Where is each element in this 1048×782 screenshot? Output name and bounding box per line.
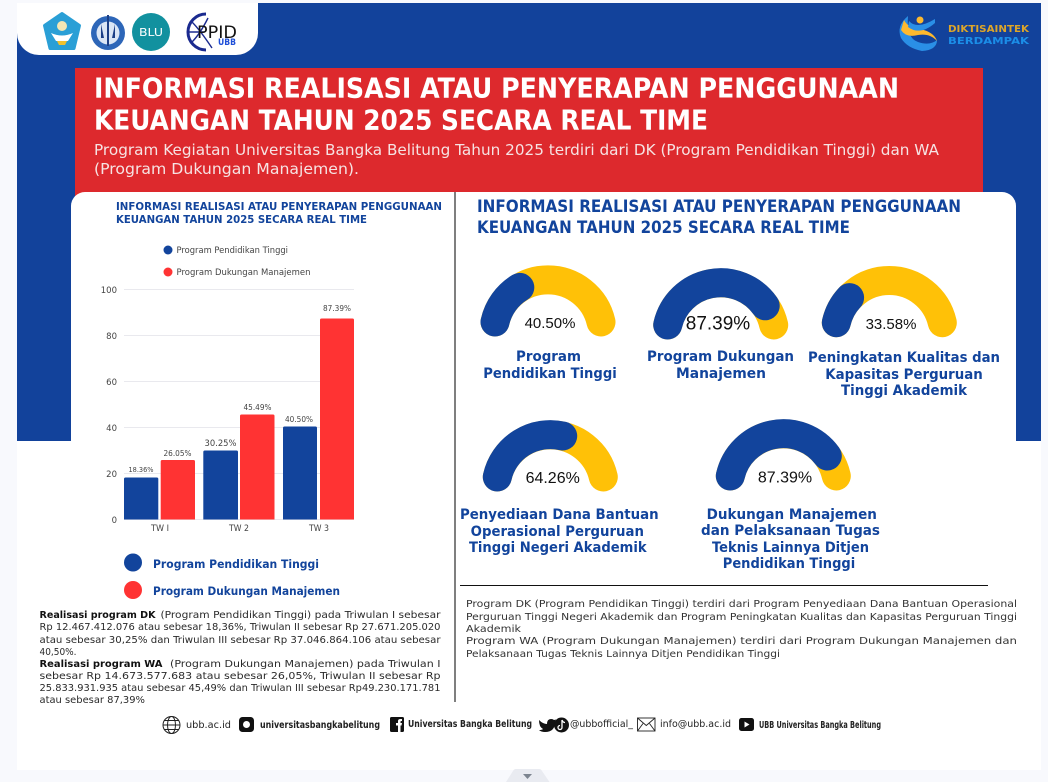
footer: social media contacts: info@ubb.ac.id	[660, 719, 731, 730]
bar chart: 30.25%	[204, 439, 237, 449]
gauge: Program Dukungan Manajemen: Program Dukungan	[647, 349, 794, 365]
footer: social media contacts: ubb.ac.id	[186, 720, 231, 731]
left panel: bar chart section	[40, 200, 442, 706]
text: realisasi program DK and WA: atau sebesar 87,39%	[40, 695, 145, 706]
text: program notes: Perguruan Tinggi Negeri Akademik dan Program Peningkatan Kualitas dan Kapasitas Perguruan Tinggi	[466, 612, 1017, 623]
icon: BLU logo: BLU	[139, 26, 163, 39]
subtitle	[94, 141, 940, 178]
icon: PPID UBB logo: PPID	[197, 23, 237, 43]
footer: social media contacts	[163, 716, 881, 734]
gauge: Program Pendidikan Tinggi: Program	[516, 349, 581, 365]
gauge: Penyediaan Dana Bantuan: Tinggi Negeri Akademik	[469, 540, 647, 556]
icon: instagram	[239, 717, 254, 732]
icon: facebook	[390, 717, 404, 732]
bar chart: 18.36%	[128, 466, 154, 474]
large legend: Program Pendidikan Tinggi	[153, 557, 319, 571]
bar chart: TW I	[150, 524, 169, 534]
icon: Tut Wuri Handayani logo	[44, 14, 80, 48]
Diktisaintek Berdampak logo	[900, 16, 1030, 51]
chart heading: KEUANGAN TAHUN 2025 SECARA REAL TIME	[116, 213, 367, 226]
bar chart: 60	[106, 378, 117, 388]
large legend	[124, 554, 340, 599]
text: program notes: Pelaksanaan Tugas Teknis Lainnya Ditjen Pendidikan Tinggi	[466, 649, 780, 660]
bar chart: 45.49%	[244, 403, 272, 412]
icon: tiktok	[554, 718, 569, 732]
gauge: Program Dukungan Manajemen: Manajemen	[676, 366, 766, 382]
gauge: Program Pendidikan Tinggi: 40.50%	[525, 315, 575, 332]
large legend: Program Dukungan Manajemen	[153, 584, 340, 598]
bar chart: TW 3	[308, 524, 329, 534]
bar chart: 20	[106, 470, 117, 480]
scroll tab with arrow	[506, 769, 550, 782]
icon: globe	[163, 716, 180, 734]
gauges heading	[477, 197, 961, 237]
chart legend: Program Dukungan Manajemen	[176, 268, 310, 278]
text: realisasi program DK and WA: sebesar Rp 14.673.577.683 atau sebesar 26,05%, Triwulan II sebesar Rp	[40, 671, 440, 682]
text: realisasi program DK and WA: Realisasi program DK	[40, 610, 157, 621]
gauge: Penyediaan Dana Bantuan: 64.26%	[526, 470, 580, 487]
subtitle: (Program Dukungan Manajemen).	[94, 160, 359, 178]
gauge: Dukungan Manajemen dan Pelaksanaan	[701, 434, 880, 572]
logo bar	[17, 3, 258, 55]
text: program notes: Program DK (Program Pendidikan Tinggi) terdiri dari Program Penyediaan Dana Bantuan Operasional	[466, 599, 1017, 610]
icon: mail	[638, 718, 655, 731]
subtitle: Program Kegiatan Universitas Bangka Belitung Tahun 2025 terdiri dari DK (Program Pendidikan Tinggi) dan WA	[94, 141, 940, 159]
gauge: Program Pendidikan Tinggi	[483, 280, 617, 382]
text: program notes: Program WA (Program Dukungan Manajemen) terdiri dari Program Dukungan Manajemen dan	[466, 636, 1017, 647]
gauge: Dukungan Manajemen dan Pelaksanaan: Pendidikan Tinggi	[723, 556, 855, 572]
text: realisasi program DK and WA	[40, 610, 441, 706]
chart legend	[164, 246, 310, 278]
chart heading	[116, 200, 442, 226]
bar chart: 100	[101, 286, 117, 296]
gauge: Penyediaan Dana Bantuan	[460, 435, 659, 556]
bar chart: 80	[106, 332, 117, 342]
bar chart: 26.05%	[164, 449, 192, 458]
text: realisasi program DK and WA: 25.833.931.935 atau sebesar 45,49% dan Triwulan III sebesar Rp49.230.171.781	[40, 683, 440, 694]
text: realisasi program DK and WA: Rp 12.467.412.076 atau sebesar 18,36%, Triwulan II sebesar Rp 27.671.205.020	[40, 622, 440, 633]
icon: BLU logo	[132, 13, 170, 51]
text: realisasi program DK and WA: atau sebesar 30,25% dan Triwulan III sebesar Rp 37.046.864.106 atau sebesar	[40, 635, 441, 646]
bar chart: TW 2	[228, 524, 249, 534]
right panel: gauges section	[460, 197, 1017, 660]
icon: twitter	[539, 719, 556, 732]
gauges heading: INFORMASI REALISASI ATAU PENYERAPAN PENGGUNAAN	[477, 197, 961, 216]
gauge: Peningkatan Kualitas	[808, 281, 1000, 399]
icon: university logo	[91, 15, 125, 50]
gauge: Program Dukungan Manajemen	[647, 283, 794, 382]
bar chart	[101, 286, 354, 534]
gauge: Dukungan Manajemen dan Pelaksanaan: dan Pelaksanaan Tugas	[701, 523, 880, 539]
gauge: Dukungan Manajemen dan Pelaksanaan: Teknis Lainnya Ditjen	[712, 540, 869, 556]
bar chart: 87.39%	[323, 304, 351, 313]
footer: social media contacts: @ubbofficial_	[570, 719, 633, 730]
title: INFORMASI REALISASI ATAU PENYERAPAN PENGGUNAAN	[94, 72, 899, 104]
white content panel	[71, 192, 1016, 441]
gauge: Program Pendidikan Tinggi: Pendidikan Tinggi	[483, 366, 617, 382]
icon: PPID UBB logo	[188, 14, 237, 50]
gauge: Program Dukungan Manajemen: 87.39%	[686, 314, 750, 334]
gauge: Penyediaan Dana Bantuan: Operasional Perguruan	[471, 524, 644, 540]
text: realisasi program DK and WA: (Program Dukungan Manajemen) pada Triwulan I	[170, 659, 440, 670]
bar chart: 0	[112, 516, 117, 526]
footer: social media contacts: universitasbangkabelitung	[260, 720, 380, 731]
panel: red title banner	[75, 68, 983, 198]
gauge: Dukungan Manajemen dan Pelaksanaan: Dukungan Manajemen	[707, 507, 877, 523]
text: realisasi program DK and WA: (Program Pendidikan Tinggi) pada Triwulan I sebesar	[160, 610, 441, 621]
bar chart: 40.50%	[285, 415, 313, 424]
footer: social media contacts: UBB Universitas Bangka Belitung	[759, 720, 881, 731]
text: realisasi program DK and WA: 40,50%.	[40, 647, 76, 658]
icon: PPID UBB logo: UBB	[218, 38, 236, 48]
gauge: Penyediaan Dana Bantuan: Penyediaan Dana Bantuan	[460, 507, 659, 523]
text: realisasi program DK and WA: Realisasi program WA	[40, 659, 163, 670]
title	[94, 72, 899, 136]
footer: social media contacts: Universitas Bangka Belitung	[408, 719, 532, 730]
gauge: Peningkatan Kualitas: 33.58%	[866, 316, 916, 333]
gauges heading: KEUANGAN TAHUN 2025 SECARA REAL TIME	[477, 218, 850, 237]
Diktisaintek Berdampak logo: DIKTISAINTEK	[948, 24, 1030, 35]
icon: youtube	[739, 718, 754, 731]
title: KEUANGAN TAHUN 2025 SECARA REAL TIME	[94, 104, 708, 136]
text: program notes: Akademik	[466, 624, 521, 635]
chart legend: Program Pendidikan Tinggi	[176, 246, 288, 256]
bar chart: 40	[106, 424, 117, 434]
gauge: Dukungan Manajemen dan Pelaksanaan: 87.39%	[758, 470, 812, 486]
text: program notes	[466, 599, 1017, 660]
Diktisaintek Berdampak logo: BERDAMPAK	[948, 36, 1030, 47]
gauge: Peningkatan Kualitas: Tinggi Akademik	[841, 383, 968, 399]
gauge: Peningkatan Kualitas: Kapasitas Perguruan	[825, 367, 983, 383]
chart heading: INFORMASI REALISASI ATAU PENYERAPAN PENGGUNAAN	[116, 200, 442, 213]
blue header background	[17, 3, 1041, 441]
gauge: Peningkatan Kualitas: Peningkatan Kualitas dan	[808, 350, 1000, 366]
